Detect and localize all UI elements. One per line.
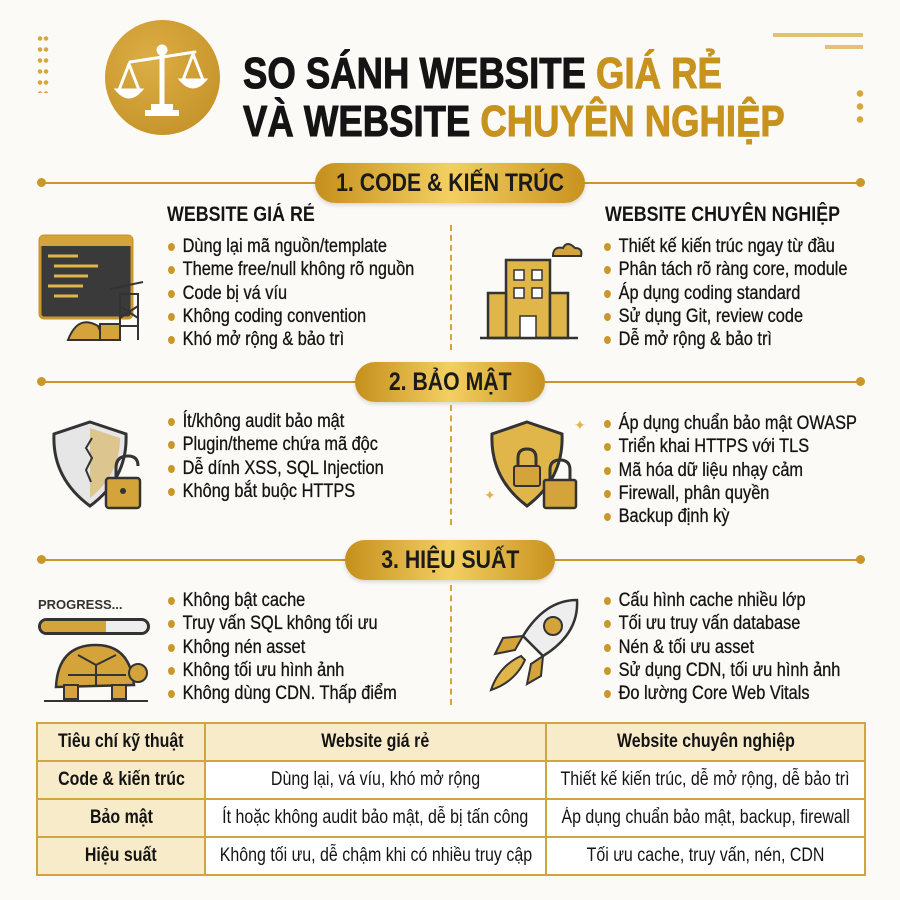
icon: broken shield [52, 420, 142, 510]
section 1 line [42, 182, 860, 184]
list: giá rẻ hiệu suất: Không dùng CDN. Thấp điểm [183, 683, 397, 704]
heading: 2. Bảo mật: 2. BẢO MẬT [389, 368, 511, 396]
title: SO SÁNH WEBSITE GIÁ RẺ [243, 49, 722, 98]
heading: 2. Bảo mật [355, 362, 545, 402]
comparison table: Hiệu suất [85, 845, 157, 866]
comparison table: Code & kiến trúc [58, 769, 184, 790]
list: chuyên nghiệp hiệu suất: Cấu hình cache nhiều lớp [619, 590, 806, 611]
comparison table: Ít hoặc không audit bảo mật, dễ bị tấn công [222, 807, 529, 828]
list: chuyên nghiệp bảo mật: Áp dụng chuẩn bảo mật OWASP [619, 413, 857, 434]
list: chuyên nghiệp bảo mật: Triển khai HTTPS với TLS [619, 436, 809, 457]
title [242, 48, 785, 146]
icon: secure shield: ✦ [484, 487, 496, 503]
comparison table: Áp dụng chuẩn bảo mật, backup, firewall [561, 807, 850, 828]
list: giá rẻ bảo mật: Ít/không audit bảo mật [183, 411, 344, 432]
list: chuyên nghiệp bảo mật: Firewall, phân quyền [619, 483, 769, 504]
heading: 3. Hiệu suất: 3. HIỆU SUẤT [381, 546, 519, 574]
list: giá rẻ code: Dùng lại mã nguồn/template [183, 236, 387, 257]
section 3 line [42, 559, 860, 561]
icon: scales circle [105, 20, 220, 135]
icon: progress + turtle: PROGRESS... [38, 597, 123, 612]
comparison table: Tiêu chí kỹ thuật [58, 731, 184, 752]
comparison table: Tối ưu cache, truy vấn, nén, CDN [587, 845, 824, 866]
icon: building [480, 243, 582, 340]
list: giá rẻ hiệu suất: Không bật cache [183, 590, 305, 611]
list: giá rẻ hiệu suất: Không nén asset [183, 637, 305, 658]
list: chuyên nghiệp bảo mật: Backup định kỳ [619, 506, 729, 527]
list: chuyên nghiệp code: Thiết kế kiến trúc ngay từ đầu [619, 236, 835, 257]
list: chuyên nghiệp code: Sử dụng Git, review code [619, 306, 803, 327]
list: chuyên nghiệp bảo mật [604, 412, 857, 527]
heading: website chuyên nghiệp: WEBSITE CHUYÊN NGHIỆP [605, 203, 840, 226]
list: chuyên nghiệp hiệu suất [604, 590, 840, 704]
comparison table: Website giá rẻ [322, 731, 429, 752]
list: giá rẻ code: Code bị vá víu [183, 283, 287, 304]
icon: secure shield [484, 418, 586, 510]
list: giá rẻ code: Theme free/null không rõ nguồn [183, 259, 414, 280]
decorative dots left [37, 33, 49, 93]
list: giá rẻ bảo mật [168, 410, 384, 502]
list: giá rẻ hiệu suất [168, 590, 397, 704]
icon: code editor [38, 234, 144, 341]
heading: website giá rẻ: WEBSITE GIÁ RẺ [167, 203, 315, 226]
comparison table: Website chuyên nghiệp [617, 731, 794, 752]
comparison table: Dùng lại, vá víu, khó mở rộng [271, 769, 480, 790]
list: giá rẻ bảo mật: Plugin/theme chứa mã độc [183, 434, 378, 455]
list: giá rẻ bảo mật: Không bắt buộc HTTPS [183, 481, 355, 502]
list: giá rẻ bảo mật: Dễ dính XSS, SQL Injection [183, 458, 384, 479]
list: chuyên nghiệp hiệu suất: Đo lường Core Web Vitals [619, 683, 810, 704]
heading: 3. Hiệu suất [345, 540, 555, 580]
list: giá rẻ code: Không coding convention [183, 306, 366, 327]
list: chuyên nghiệp code: Dễ mở rộng & bảo trì [619, 329, 772, 350]
list: chuyên nghiệp hiệu suất: Sử dụng CDN, tối ưu hình ảnh [619, 660, 840, 681]
list: giá rẻ code [168, 236, 414, 350]
section 2 line [42, 381, 860, 383]
heading: 1. Code & kiến trúc: 1. CODE & KIẾN TRÚC [336, 169, 564, 197]
list: chuyên nghiệp code: Áp dụng coding standard [619, 283, 800, 304]
heading: 1. Code & kiến trúc [315, 163, 585, 203]
comparison table [36, 722, 866, 876]
icon: progress + turtle [38, 597, 150, 702]
list: giá rẻ code: Khó mở rộng & bảo trì [183, 329, 344, 350]
list: chuyên nghiệp code: Phân tách rõ ràng core, module [619, 259, 848, 280]
list: giá rẻ hiệu suất: Không tối ưu hình ảnh [183, 660, 344, 681]
comparison table: Thiết kế kiến trúc, dễ mở rộng, dễ bảo trì [561, 769, 850, 790]
list: chuyên nghiệp bảo mật: Mã hóa dữ liệu nhạy cảm [619, 460, 803, 481]
list: chuyên nghiệp code [604, 236, 848, 350]
list: chuyên nghiệp hiệu suất: Tối ưu truy vấn database [619, 613, 800, 634]
list: chuyên nghiệp hiệu suất: Nén & tối ưu asset [619, 637, 754, 658]
icon: rocket [490, 598, 578, 692]
list: giá rẻ hiệu suất: Truy vấn SQL không tối ưu [183, 613, 378, 634]
title: VÀ WEBSITE CHUYÊN NGHIỆP [243, 97, 785, 146]
decorative lines right [773, 33, 863, 37]
comparison table: Không tối ưu, dễ chậm khi có nhiều truy cập [219, 845, 532, 866]
comparison table: Bảo mật [90, 807, 152, 828]
